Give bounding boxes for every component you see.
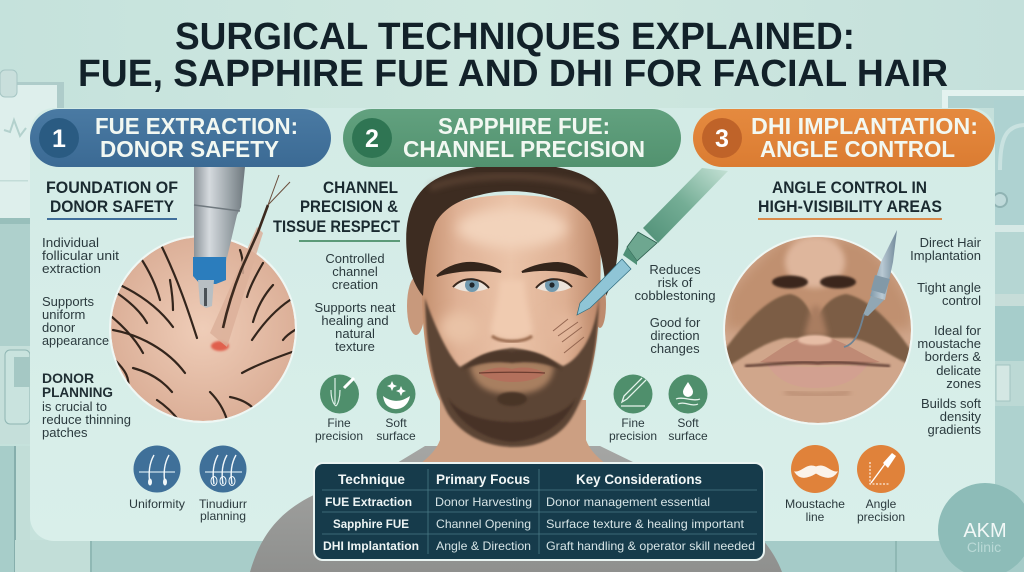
label: fine precision right	[609, 416, 657, 443]
text: supports neat healing: healing and	[321, 313, 389, 328]
extracted graft	[210, 175, 290, 347]
icon: soft surface	[376, 374, 416, 414]
icon: fine precision pen	[614, 374, 652, 414]
row: DHI implantation	[323, 539, 755, 553]
row: FUE extraction	[325, 495, 710, 509]
label: soft surface: surface	[376, 429, 416, 443]
title	[78, 16, 948, 95]
ear right	[594, 280, 606, 328]
text: individual follicular unit: Individual	[42, 235, 99, 250]
nose shadow	[492, 336, 532, 341]
row: FUE extraction: FUE Extraction	[325, 495, 412, 509]
text: direction changes	[650, 315, 701, 356]
label: soft surface right	[668, 416, 708, 443]
heading pill 3: DHI IMPLANTATION:	[751, 113, 978, 139]
title: FUE, SAPPHIRE FUE AND DHI FOR FACIAL HAIR	[78, 53, 948, 95]
face skin	[422, 195, 601, 446]
icon: soft surface droplet	[668, 374, 708, 414]
text: reduces cobblestoning: Reduces	[649, 262, 701, 277]
neck	[420, 400, 606, 464]
label: angle precision: precision	[857, 510, 905, 524]
label: moustache line: line	[806, 510, 825, 524]
heading pill 1	[30, 109, 331, 167]
text: supports uniform: uniform	[42, 307, 85, 322]
text: donor planning: is crucial to	[42, 399, 107, 414]
subheading 1: DONOR SAFETY	[50, 197, 175, 216]
lower lip	[767, 364, 868, 388]
text: reduces cobblestoning: risk of	[658, 275, 693, 290]
cheek highlight right	[542, 312, 578, 344]
row: DHI implantation: Graft handling & operator skill needed	[546, 539, 755, 553]
label: soft surface	[376, 416, 416, 443]
soul patch	[497, 392, 527, 406]
label: planning: Tinudiurr	[199, 497, 247, 511]
moustache close-up circle	[723, 235, 913, 425]
portrait of man	[250, 164, 782, 572]
text: tight angle control	[917, 280, 981, 308]
row: sapphire FUE	[333, 517, 745, 531]
heading pill 3: ANGLE CONTROL	[760, 136, 955, 162]
row: DHI implantation: Angle & Direction	[436, 539, 531, 553]
text: donor planning: patches	[42, 425, 88, 440]
heading pill 1: DONOR SAFETY	[100, 136, 279, 162]
table header row: Key Considerations	[576, 471, 702, 487]
forehead highlight	[457, 208, 567, 248]
text: tight angle control: Tight angle	[917, 280, 981, 295]
heading pill 3: 3	[715, 125, 729, 153]
text: soft density gradients: Builds soft	[921, 396, 981, 411]
label: planning	[199, 497, 247, 523]
label: angle precision: Angle	[866, 497, 897, 511]
beard	[425, 298, 599, 447]
center panel	[30, 108, 995, 541]
text: supports uniform: Supports	[42, 294, 95, 309]
icon: fine precision	[320, 374, 359, 414]
text: tight angle control: control	[942, 293, 981, 308]
row: FUE extraction: Donor Harvesting	[435, 495, 532, 509]
title: SURGICAL TECHNIQUES EXPLAINED:	[175, 16, 855, 58]
text: ideal for moustache: borders &	[925, 349, 981, 364]
label: fine precision	[315, 416, 363, 443]
row: sapphire FUE: Sapphire FUE	[333, 517, 409, 531]
subheading 3	[758, 178, 942, 220]
text: supports neat healing: texture	[335, 339, 375, 354]
row: DHI implantation: DHI Implantation	[323, 539, 419, 553]
right eye	[536, 278, 572, 292]
text: soft density gradients	[921, 396, 981, 437]
FUE handpiece tool	[193, 167, 245, 308]
hair	[406, 164, 618, 296]
table header row: Primary Focus	[436, 471, 530, 487]
heading pill 2: 2	[365, 125, 379, 153]
sapphire pen tool	[577, 168, 728, 315]
cheek highlight left	[440, 312, 480, 344]
subheading 2: CHANNEL	[323, 178, 398, 197]
text: donor planning	[42, 370, 131, 440]
text: direction changes: changes	[650, 341, 700, 356]
skin around mouth	[470, 358, 554, 394]
heading pill 2: CHANNEL PRECISION	[403, 136, 645, 162]
text: direction changes: Good for	[650, 315, 701, 330]
text: individual follicular unit: extraction	[42, 261, 101, 276]
left eyebrow	[437, 263, 501, 276]
text: ideal for moustache: delicate	[936, 363, 981, 378]
panel 3: DHI implantation	[693, 109, 995, 524]
label: soft surface right: Soft	[677, 416, 699, 430]
right eyebrow	[522, 263, 585, 276]
label: fine precision right: precision	[609, 429, 657, 443]
ear left	[407, 277, 425, 335]
text: supports neat healing: Supports neat	[314, 300, 396, 315]
heading pill 2: SAPPHIRE FUE:	[438, 113, 610, 139]
subheading 3: HIGH-VISIBILITY AREAS	[758, 197, 942, 216]
hair shading	[430, 176, 595, 190]
text: reduces cobblestoning	[634, 262, 716, 303]
subheading 2: TISSUE RESPECT	[273, 217, 401, 236]
text: individual follicular unit: follicular unit	[42, 248, 119, 263]
text: reduces cobblestoning: cobblestoning	[634, 288, 716, 303]
label: moustache line: Moustache	[785, 497, 845, 511]
grey t-shirt	[250, 446, 782, 572]
text: ideal for moustache: moustache	[917, 336, 981, 351]
icon: moustache	[791, 445, 839, 493]
text: supports neat healing	[314, 300, 396, 354]
text: donor planning: DONOR	[42, 370, 94, 386]
scalp close-up circle	[109, 235, 297, 423]
row: FUE extraction: Donor management essential	[546, 495, 710, 509]
row: sapphire FUE: Channel Opening	[436, 517, 531, 531]
text: controlled channel: Controlled	[325, 251, 385, 266]
heading pill 3	[693, 109, 995, 167]
label: uniformity: Uniformity	[129, 497, 185, 511]
label: fine precision right: Fine	[621, 416, 645, 430]
subheading 3: ANGLE CONTROL IN	[772, 178, 927, 197]
lips	[479, 368, 545, 382]
panel 1: FUE extraction	[30, 109, 331, 523]
text: ideal for moustache: Ideal for	[934, 323, 982, 338]
table header row: Technique	[338, 471, 405, 487]
text: individual follicular unit	[42, 235, 119, 276]
text: direct hair implantation	[910, 235, 982, 263]
heading pill 1: 1	[52, 125, 66, 153]
subheading 1	[46, 178, 178, 220]
upper-cheek shading	[725, 240, 912, 330]
label: soft surface right: surface	[668, 429, 708, 443]
label: fine precision: Fine	[327, 416, 351, 430]
label: fine precision: precision	[315, 429, 363, 443]
text: soft density gradients: gradients	[928, 422, 981, 437]
text: supports uniform: appearance	[42, 333, 109, 348]
left eye	[453, 278, 489, 292]
label: angle precision	[857, 497, 905, 524]
subheading 1: FOUNDATION OF	[46, 178, 178, 197]
label: soft surface: Soft	[385, 416, 407, 430]
moustache	[462, 351, 562, 370]
row: sapphire FUE: Surface texture & healing important	[546, 517, 745, 531]
DHI implanter tool	[844, 230, 897, 347]
text: supports uniform	[42, 294, 109, 348]
text: direction changes: direction	[650, 328, 700, 343]
clinic logo badge: Clinic	[967, 539, 1001, 555]
text: supports neat healing: natural	[335, 326, 375, 341]
text: controlled channel: channel	[332, 264, 378, 279]
text: controlled channel: creation	[332, 277, 378, 292]
text: supports uniform: donor	[42, 320, 76, 335]
text: donor planning: PLANNING	[42, 384, 113, 400]
table header row	[338, 471, 702, 487]
beard dark underside	[448, 398, 576, 442]
text: ideal for moustache: zones	[946, 376, 981, 391]
comparison table	[314, 463, 764, 560]
heading pill 2	[343, 109, 681, 167]
text: direct hair implantation: Direct Hair	[920, 235, 982, 250]
subheading 2: PRECISION &	[300, 197, 398, 216]
heading pill 1: FUE EXTRACTION:	[95, 113, 298, 139]
icon: planning	[200, 446, 246, 492]
upper lip	[760, 339, 880, 365]
label: planning: planning	[200, 509, 246, 523]
text: direct hair implantation: Implantation	[910, 248, 981, 263]
sapphire channel marks	[553, 319, 584, 353]
icon: angle precision	[857, 445, 905, 493]
clinic logo badge	[938, 483, 1024, 572]
text: soft density gradients: density	[940, 409, 981, 424]
subheading 2	[273, 178, 401, 242]
text: controlled channel	[325, 251, 385, 292]
text: ideal for moustache	[917, 323, 982, 391]
text: donor planning: reduce thinning	[42, 412, 131, 427]
label: moustache line	[785, 497, 845, 524]
lip line	[479, 371, 545, 374]
panel 2: Sapphire FUE	[273, 109, 716, 443]
clinic logo badge: AKM	[963, 520, 1007, 542]
icon: uniformity	[134, 446, 180, 492]
nose	[491, 280, 532, 339]
